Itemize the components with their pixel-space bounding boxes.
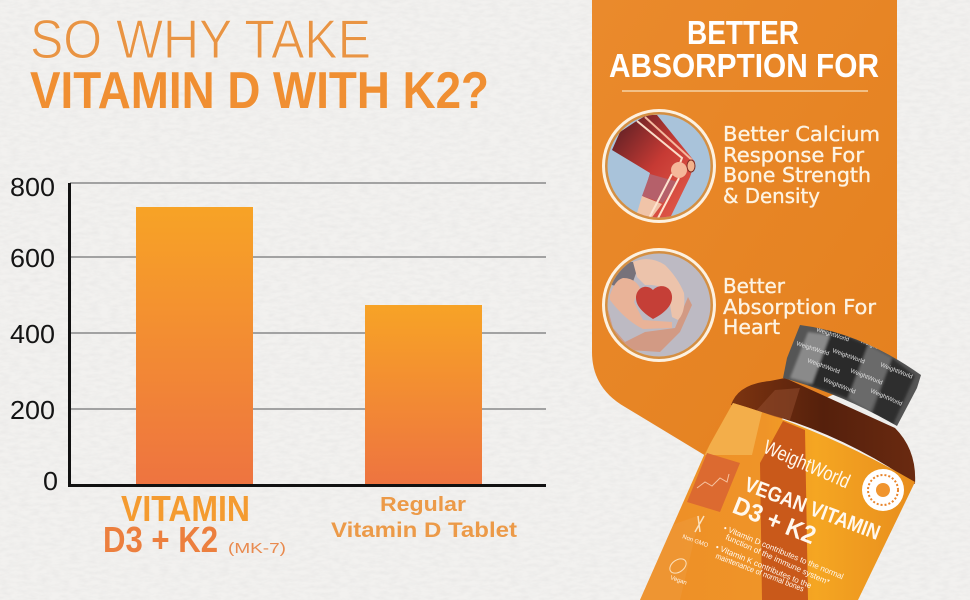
label: Vitamin D3 + K2: [103, 488, 286, 560]
text: heart benefit: Better: [723, 274, 786, 298]
non-GMO icon: [695, 516, 704, 532]
bottle cap: WeightWorld: [795, 341, 830, 357]
text: calcium benefit: Bone Strength: [723, 163, 871, 187]
icon: knee: [602, 109, 716, 223]
label: Vitamin D3 + K2: D3 + K2: [103, 519, 218, 560]
bottle brand and name: [669, 436, 883, 594]
bottle brand and name: • Vitamin D contributes to the normal: [722, 524, 845, 581]
panel heading: [609, 14, 879, 91]
y axis labels: 600: [10, 243, 55, 273]
panel: better absorption: [592, 0, 897, 456]
y axis labels: 800: [10, 172, 55, 202]
bottle brand and name: Non GMO: [681, 534, 709, 549]
product bottle: [630, 325, 930, 600]
bottle cap: WeightWorld: [879, 362, 913, 381]
panel heading: ABSORPTION FOR: [609, 47, 879, 84]
label: Vitamin D3 + K2: (MK-7): [228, 540, 286, 557]
label: Regular Vitamin D Tablet: Vitamin D Tablet: [331, 519, 517, 542]
molecule icon: [697, 474, 729, 488]
bottle brand and name: D3 + K2: [729, 492, 820, 550]
title: VITAMIN D WITH K2?: [30, 62, 489, 120]
icon: heart in hands: [602, 248, 716, 362]
text: calcium benefit: Response For: [723, 143, 865, 167]
bottle cap: WeightWorld: [822, 377, 856, 396]
text: heart benefit: Absorption For: [723, 295, 877, 319]
bottle cap: WeightWorld: [806, 358, 840, 376]
bottle cap: WeightWorld: [815, 327, 850, 343]
bottle neck and shoulder: [731, 378, 915, 484]
certification seal: [862, 469, 904, 511]
bottle cap: WeightWorld: [849, 368, 883, 387]
bottle label: [640, 403, 915, 600]
title: SO WHY TAKE: [30, 8, 371, 70]
text: heart benefit: Heart: [723, 315, 780, 339]
text: heart benefit: [723, 274, 877, 339]
bottle brand and name: function of the immune system*: [724, 533, 831, 587]
bottle brand and name: Vegan: [669, 575, 687, 587]
panel heading: BETTER: [687, 14, 799, 51]
label: Regular Vitamin D Tablet: Regular: [380, 494, 466, 516]
y axis labels: [10, 172, 58, 496]
y axis labels: 0: [43, 466, 58, 496]
bottle cap: WeightWorld: [869, 388, 903, 408]
bottle brand and name: WeightWorld: [760, 436, 853, 493]
bottle brand and name: maintenance of normal bones: [714, 551, 805, 594]
text: calcium benefit: [723, 122, 880, 208]
text: calcium benefit: Better Calcium: [723, 122, 880, 146]
bar chart: [10, 172, 546, 496]
title: [30, 8, 489, 120]
vegan leaf icon: [669, 558, 687, 574]
bottle brand and name: VEGAN VITAMIN: [741, 473, 883, 545]
bottle cap: Weight: [859, 338, 879, 351]
label: Regular Vitamin D Tablet: [331, 494, 517, 542]
bar: Regular Vitamin D: [365, 305, 482, 484]
bottle cap: WeightWorld: [831, 348, 865, 366]
bottle brand and name: • Vitamin K contributes to the: [714, 543, 813, 590]
label: Vitamin D3 + K2: VITAMIN: [121, 488, 250, 529]
y axis labels: 400: [10, 319, 55, 349]
y axis labels: 200: [10, 395, 55, 425]
bottle cap: [783, 325, 921, 426]
text: calcium benefit: & Density: [723, 184, 820, 208]
bar: Vitamin D3 + K2: [136, 207, 253, 484]
